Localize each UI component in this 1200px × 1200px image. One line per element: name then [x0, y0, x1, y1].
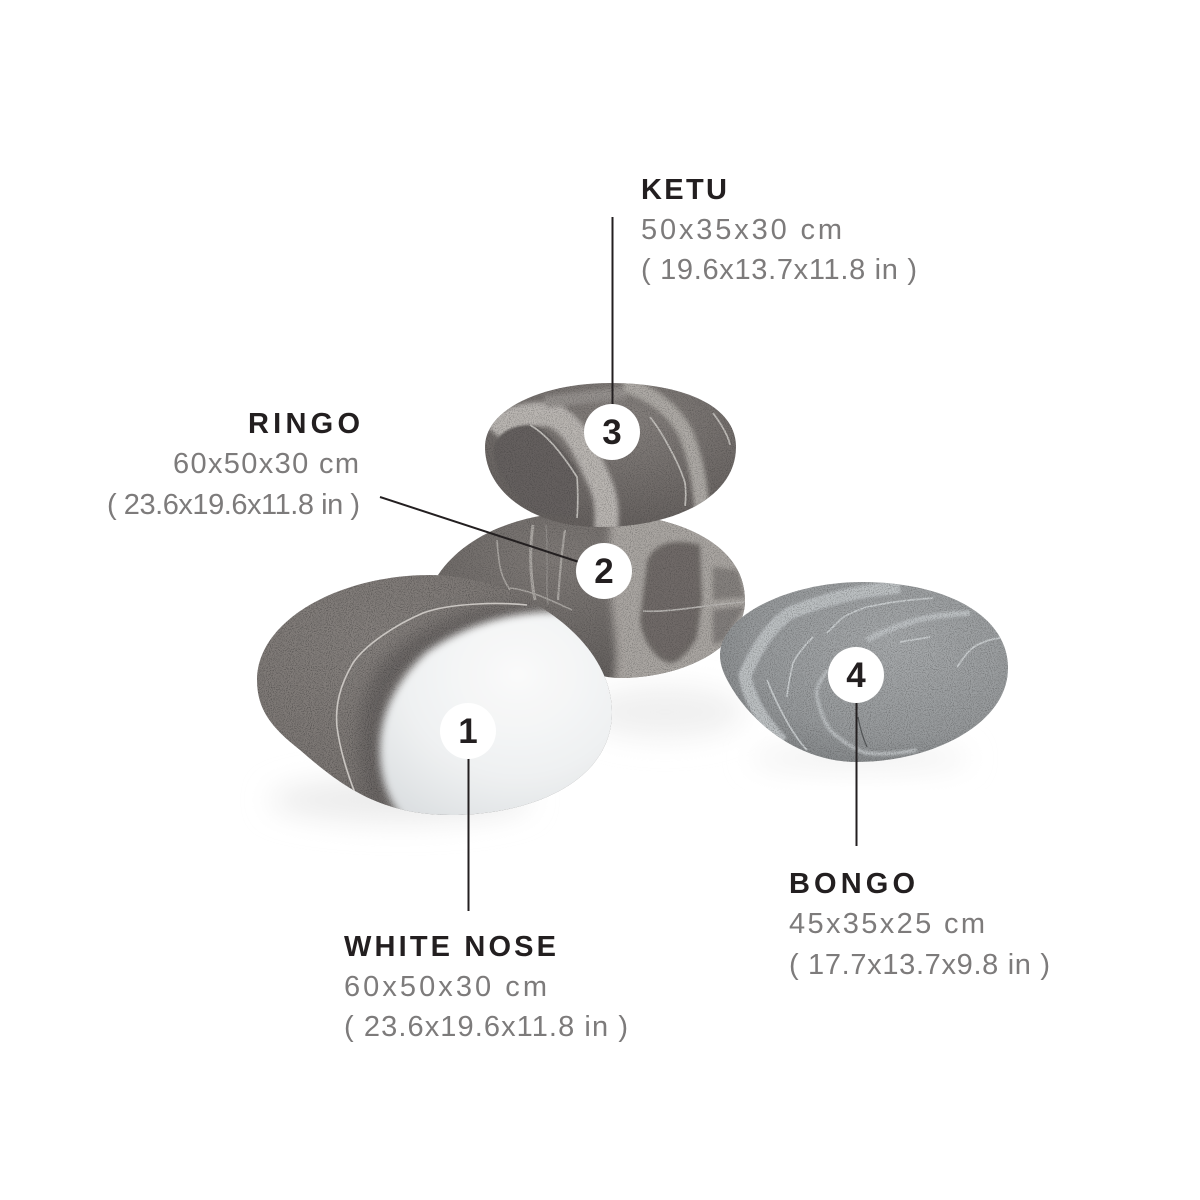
stone 4: Bongo: [715, 578, 1015, 768]
marker 2: [576, 543, 632, 599]
label: Ketu: ( 19.6x13.7x11.8 in ): [641, 254, 917, 286]
label: Ketu: KETU: [641, 174, 727, 206]
label: White Nose: WHITE NOSE: [344, 931, 556, 963]
marker 3: 3: [602, 413, 622, 452]
label: Ringo: RINGO: [248, 408, 360, 440]
leader line: White Nose: [468, 755, 470, 911]
stone 2: Ringo: [438, 516, 745, 678]
label: Bongo: ( 17.7x13.7x9.8 in ): [789, 949, 1050, 981]
marker 1: 1: [458, 712, 478, 751]
stone 1: White Nose: [257, 575, 612, 815]
marker 3: [584, 404, 640, 460]
label: Ketu: 50x35x30 cm: [641, 214, 842, 246]
leader line: Ketu: [612, 217, 614, 405]
label: Ringo: ( 23.6x19.6x11.8 in ): [107, 489, 360, 521]
marker 4: [828, 647, 884, 703]
marker 4: 4: [846, 656, 866, 695]
label: Ringo: [107, 408, 360, 521]
label: Ringo: 60x50x30 cm: [173, 448, 359, 480]
label: Bongo: [789, 868, 1050, 981]
label: Ketu: [641, 174, 917, 286]
leader line: Bongo: [856, 700, 858, 846]
label: White Nose: [344, 931, 628, 1043]
marker 2: 2: [594, 552, 614, 591]
label: White Nose: 60x50x30 cm: [344, 971, 547, 1003]
marker 1: [440, 703, 496, 759]
label: Bongo: BONGO: [789, 868, 915, 900]
label: Bongo: 45x35x25 cm: [789, 908, 985, 940]
label: White Nose: ( 23.6x19.6x11.8 in ): [344, 1011, 628, 1043]
stone 3: Ketu: [485, 383, 736, 527]
leader line: Ringo: [380, 497, 585, 564]
floor shadows: [270, 686, 970, 822]
